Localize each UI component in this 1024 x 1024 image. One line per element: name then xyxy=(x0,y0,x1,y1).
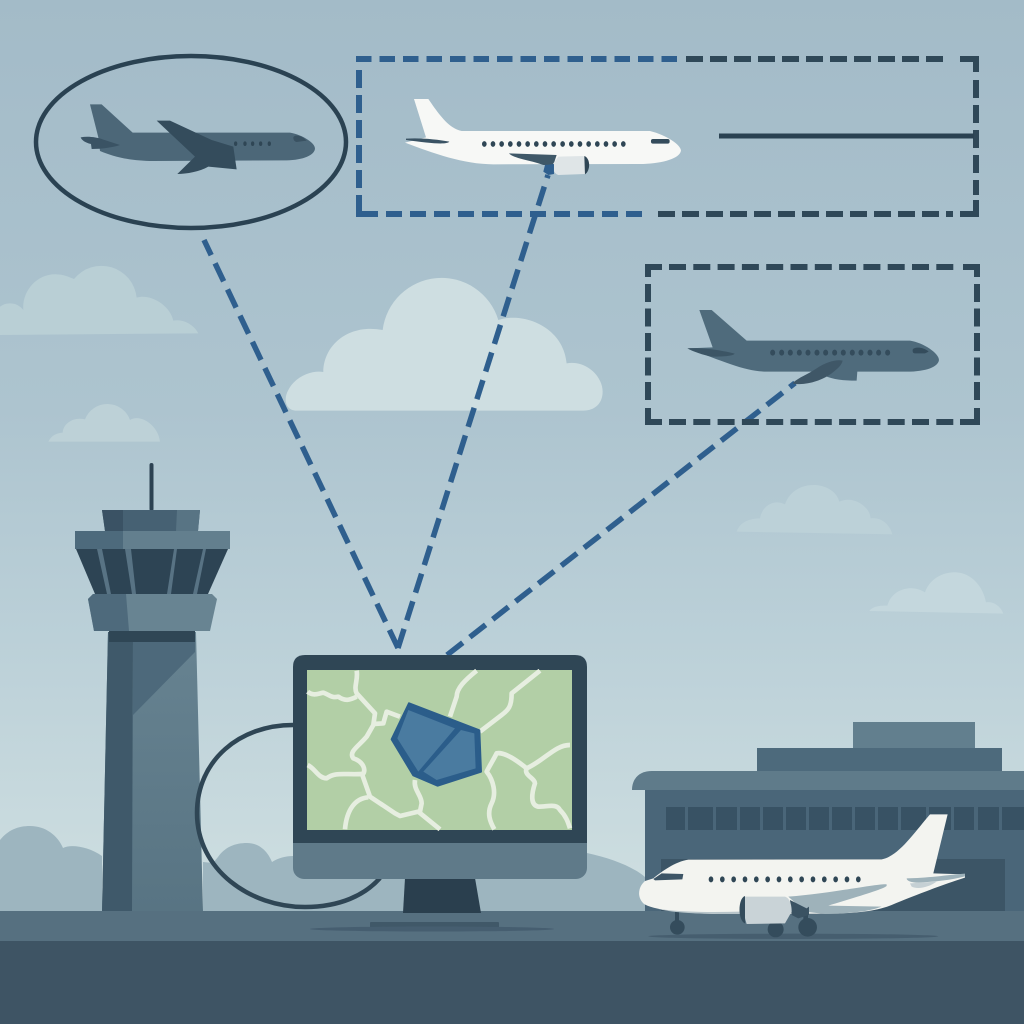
box outline xyxy=(648,267,977,422)
hangar door xyxy=(661,859,1005,912)
white plane xyxy=(405,99,681,175)
plane fuselage xyxy=(639,814,965,914)
map screen xyxy=(307,670,572,830)
cloud: right lower xyxy=(869,572,1003,614)
highlighted blue region on map xyxy=(392,703,481,786)
monitor cable xyxy=(197,725,380,907)
monitor bezel xyxy=(293,655,587,843)
cockpit window xyxy=(653,873,683,880)
tower antenna xyxy=(150,463,154,511)
engine pylon xyxy=(790,900,809,918)
belly shading xyxy=(658,909,740,914)
grey plane xyxy=(687,310,939,384)
computer monitor with map xyxy=(293,655,587,932)
terminal roof xyxy=(632,771,1024,790)
ellipse callout with dark plane xyxy=(36,56,346,228)
terminal main body xyxy=(645,788,1024,912)
terminal building xyxy=(632,722,1024,912)
monitor shadow xyxy=(310,926,554,932)
dashed callout box with white plane xyxy=(356,59,976,214)
tower cap xyxy=(102,510,200,531)
terminal second storey xyxy=(757,748,1002,772)
map roads xyxy=(308,671,570,829)
monitor chin xyxy=(293,800,587,879)
foreground strip xyxy=(0,941,1024,1024)
leader line: white plane to monitor xyxy=(398,175,548,648)
monitor stand xyxy=(403,878,481,913)
ground apron xyxy=(0,911,1024,942)
terminal top block xyxy=(853,722,975,749)
monitor base xyxy=(370,922,499,929)
cloud: small left xyxy=(48,404,160,442)
tower upper band xyxy=(75,531,230,549)
parked white plane xyxy=(639,814,965,939)
wing xyxy=(788,884,887,914)
distant hills xyxy=(0,826,645,911)
tail stabiliser xyxy=(907,874,965,888)
terminal window row xyxy=(666,807,1024,830)
window row xyxy=(709,876,861,882)
leader line: dashed box plane to monitor xyxy=(447,383,795,655)
cloud: upper left xyxy=(0,266,198,335)
plane ground shadow xyxy=(648,934,938,939)
ellipse outline xyxy=(36,56,346,228)
tower glass cab xyxy=(76,549,228,594)
tower shaft xyxy=(102,631,203,911)
control tower xyxy=(75,463,230,911)
dark plane xyxy=(81,104,315,174)
engine intake xyxy=(739,896,745,923)
leader line: ellipse to monitor xyxy=(204,240,398,648)
cloud: large centre xyxy=(286,278,603,411)
tower lower band xyxy=(88,594,217,631)
landing gear xyxy=(670,912,817,937)
dashed callout box with grey plane xyxy=(648,267,977,422)
engine xyxy=(744,897,792,924)
reference line xyxy=(719,134,974,138)
box outline xyxy=(356,59,976,214)
cloud: right upper xyxy=(737,485,892,534)
